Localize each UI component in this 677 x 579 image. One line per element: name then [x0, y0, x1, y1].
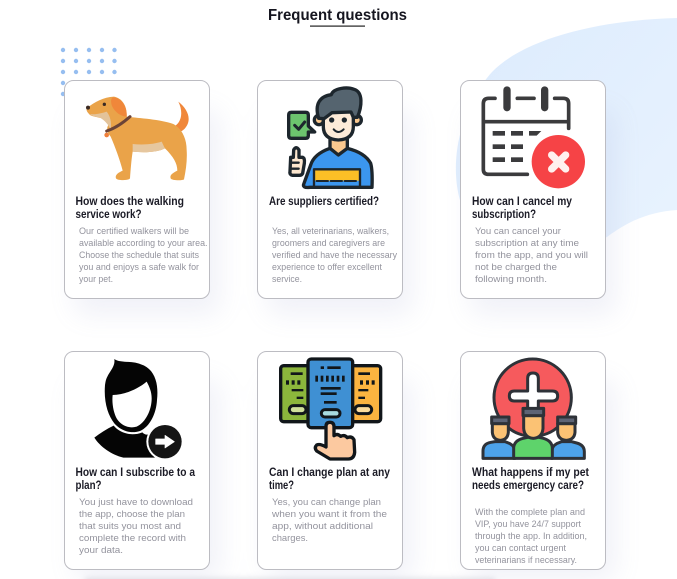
- bottom edge shadow: [85, 578, 495, 579]
- body text: [475, 507, 587, 566]
- body text: [79, 226, 208, 285]
- body text: following month.: [475, 274, 547, 285]
- icon: emergency team: [483, 359, 584, 458]
- heading: How can I cancel my: [472, 196, 573, 208]
- body text: You can cancel your: [475, 226, 561, 237]
- panel: cancel subscription: [460, 80, 606, 298]
- body text: available according to your area.: [79, 238, 208, 249]
- icon: dog: [86, 97, 189, 180]
- body text: Choose the schedule that suits: [79, 250, 199, 261]
- title underline: [310, 26, 365, 27]
- heading: [269, 467, 391, 492]
- body text: [271, 497, 387, 544]
- heading: service work?: [76, 209, 142, 221]
- body text: not be charged the: [475, 262, 557, 273]
- body text: through the app. In addition,: [475, 531, 587, 542]
- heading: What happens if my pet: [472, 467, 589, 479]
- body text: [475, 226, 588, 285]
- body text: [272, 226, 397, 285]
- body text: subscription at any time: [475, 238, 579, 249]
- heading: time?: [269, 480, 294, 492]
- heading: How can I subscribe to a: [76, 467, 196, 479]
- body text: complete the record with: [79, 533, 186, 544]
- body text: from the app, and you will: [475, 250, 588, 261]
- icon: calendar with cross: [483, 90, 585, 188]
- icon: user with arrow: [94, 359, 184, 460]
- heading: How does the walking: [76, 196, 184, 208]
- body text: groomers and caregivers are: [272, 238, 385, 249]
- body text: Yes, all veterinarians, walkers,: [272, 226, 389, 237]
- body text: Yes, you can change plan: [272, 497, 381, 508]
- body text: service.: [272, 274, 302, 285]
- body text: your pet.: [79, 274, 113, 285]
- heading: Are suppliers certified?: [269, 196, 379, 208]
- icon: certified man: [289, 88, 372, 187]
- icon: plans with hand: [281, 359, 381, 459]
- panel: walking service: [64, 80, 210, 298]
- body text: charges.: [272, 533, 308, 544]
- body text: Our certified walkers will be: [79, 226, 189, 237]
- dot grid decoration: [61, 48, 117, 96]
- body text: that suits you most and: [79, 521, 181, 532]
- panel: suppliers certified: [258, 80, 402, 298]
- heading: Can I change plan at any: [269, 467, 391, 479]
- panel: subscribe: [64, 352, 210, 570]
- body text: VIP, you have 24/7 support: [475, 519, 581, 530]
- heading: subscription?: [472, 209, 536, 221]
- heading: [472, 196, 573, 221]
- body text: your data.: [79, 545, 123, 556]
- body text: You just have to download: [79, 497, 193, 508]
- body text: [79, 497, 193, 556]
- body text: you can contact urgent: [475, 543, 566, 554]
- body text: the app, choose the plan: [79, 509, 185, 520]
- card shadows: [74, 110, 616, 579]
- body text: experience to offer excellent: [272, 262, 382, 273]
- heading: [76, 467, 196, 492]
- body text: veterinarians if necessary.: [475, 555, 577, 566]
- heading: plan?: [76, 480, 102, 492]
- title: Frequent questions: [268, 7, 407, 24]
- body text: you and enjoys a safe walk for: [79, 262, 199, 273]
- heading: [472, 467, 589, 492]
- heading: [76, 196, 184, 221]
- panel: emergency care: [460, 352, 606, 570]
- body text: With the complete plan and: [475, 507, 585, 518]
- body text: verified and have the necessary: [272, 250, 397, 261]
- heading: needs emergency care?: [472, 480, 584, 492]
- background blob: [456, 18, 677, 270]
- panel: change plan: [258, 352, 402, 570]
- body text: app, without additional: [272, 521, 373, 532]
- body text: when you want it from the: [271, 509, 387, 520]
